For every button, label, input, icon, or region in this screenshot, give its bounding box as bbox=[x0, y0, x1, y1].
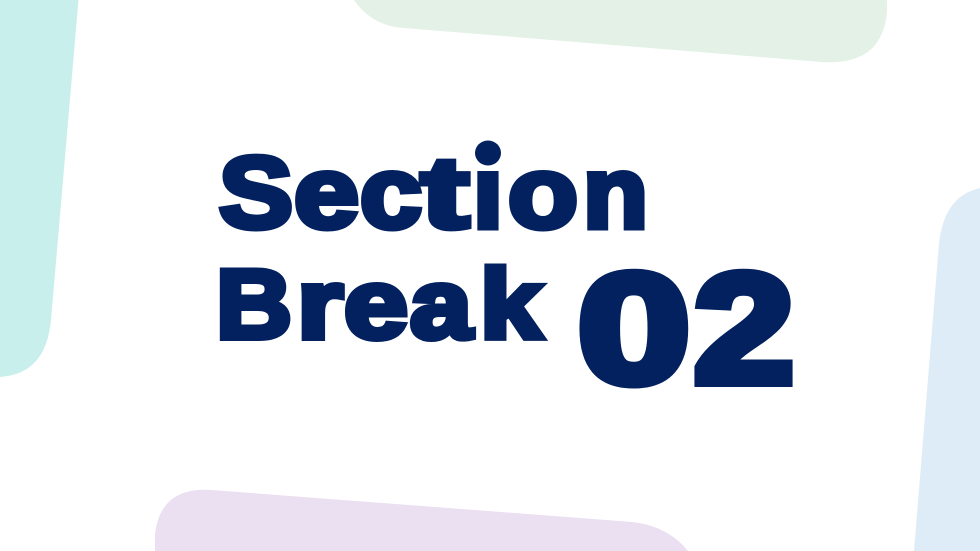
panel: purple shape bottom bbox=[155, 490, 688, 551]
panel: green shape top bbox=[354, 0, 887, 62]
title: Break: r bbox=[297, 249, 343, 359]
panel: teal shape top left bbox=[0, 0, 78, 377]
panel: blue shape right bbox=[914, 188, 980, 551]
title: Break: a bbox=[410, 249, 474, 359]
title: Break: k bbox=[480, 249, 543, 359]
title: Section: i bbox=[473, 138, 503, 250]
title: Section: c bbox=[360, 138, 422, 250]
title: Break: e bbox=[344, 249, 408, 359]
number: 02: 2 bbox=[694, 242, 794, 415]
title: Section: o bbox=[508, 138, 578, 250]
title: Section: n bbox=[583, 138, 648, 250]
icon: round dot of the i bbox=[475, 140, 501, 166]
title: Section: e bbox=[294, 138, 359, 250]
title: Section: S bbox=[219, 138, 293, 250]
number: 02: 0 bbox=[578, 242, 690, 415]
title: Section: t bbox=[421, 138, 469, 250]
title: Break: B bbox=[216, 249, 292, 359]
